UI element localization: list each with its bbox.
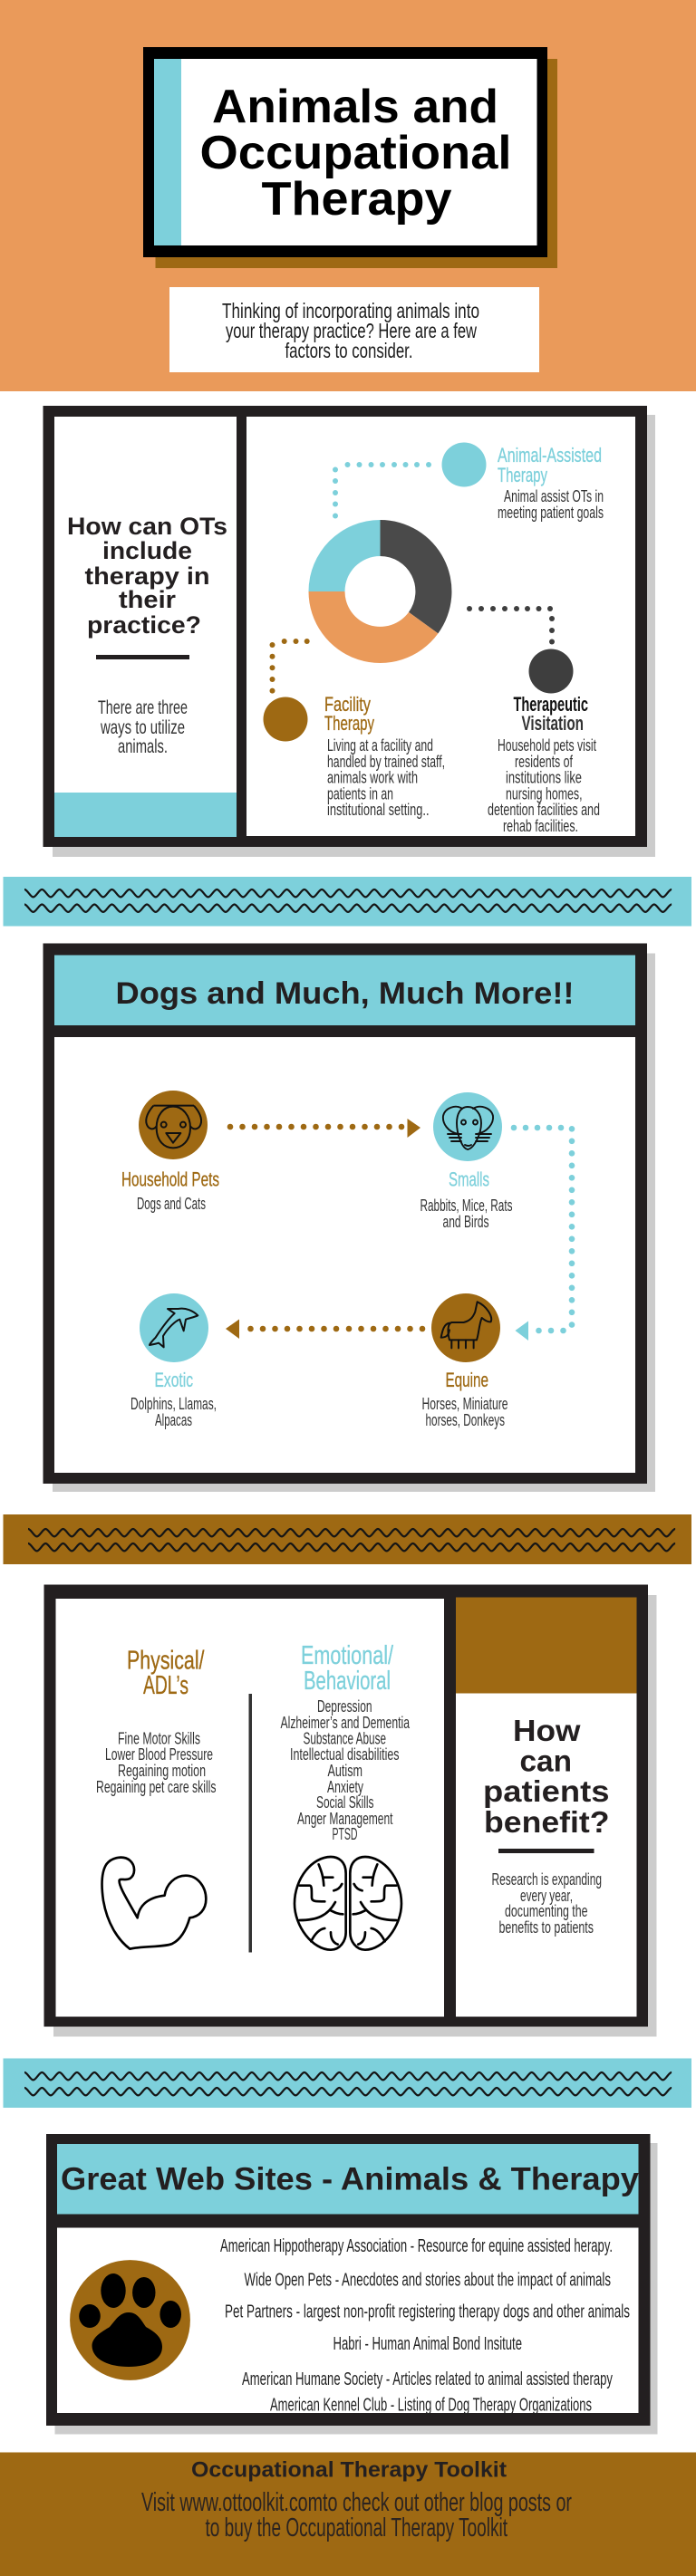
column: emotional: Emotional/ <box>301 1641 394 1670</box>
marker: animal-assisted <box>442 442 486 487</box>
label: household pets <box>121 1168 219 1213</box>
heading: how can OTs: practice? <box>87 611 201 639</box>
intro text box: your therapy practice? Here are a few <box>226 319 477 342</box>
label: exotic <box>130 1369 217 1429</box>
text: three ways <box>98 697 188 757</box>
text: therapeutic visitation: residents of <box>515 752 574 771</box>
header bar <box>57 2144 638 2214</box>
column: physical: Regaining motion <box>118 1761 206 1780</box>
column: emotional: Substance Abuse <box>303 1728 386 1748</box>
divider band: brown waves <box>4 1514 691 1564</box>
column: emotional: Social Skills <box>316 1793 373 1812</box>
divider band: teal waves <box>4 877 691 926</box>
panel: how can OTs include therapy <box>44 406 655 857</box>
text: research: Research is expanding <box>491 1870 602 1889</box>
column: emotional: Intellectual disabilities <box>290 1745 399 1764</box>
label: smalls: Rabbits, Mice, Rats <box>420 1196 513 1215</box>
column: physical: ADL’s <box>143 1671 188 1700</box>
column: physical: Fine Motor Skills <box>118 1728 200 1748</box>
heading: how can patients benefit: benefit? <box>484 1805 609 1839</box>
text: three ways: animals. <box>118 736 168 757</box>
label: smalls: Smalls <box>449 1168 489 1190</box>
text: facility therapy: patients in an <box>327 784 393 803</box>
label: exotic: Exotic <box>154 1369 193 1391</box>
panel: great web sites <box>46 2134 658 2435</box>
panel: orange header <box>0 0 696 391</box>
intro text box: factors to consider. <box>285 339 413 362</box>
label: equine: Equine <box>446 1369 488 1391</box>
icon: mouse <box>433 1092 502 1161</box>
label: household pets: Household Pets <box>121 1168 219 1190</box>
text: research <box>491 1870 602 1937</box>
title: Animals and <box>212 81 498 133</box>
column: emotional: PTSD <box>332 1824 357 1843</box>
text: facility therapy: handled by trained staff, <box>327 752 445 771</box>
title <box>199 81 511 226</box>
text: facility therapy: animals work with <box>327 768 418 786</box>
heading: how can OTs: include <box>102 537 192 564</box>
marker: facility therapy <box>263 697 308 741</box>
label: equine <box>422 1369 508 1429</box>
column: emotional: Anxiety <box>327 1777 363 1796</box>
heading rule <box>96 655 189 659</box>
text: facility therapy: Facility <box>324 693 372 716</box>
marker: therapeutic visitation <box>529 649 573 694</box>
text: animal-assisted therapy: Therapy <box>498 464 547 486</box>
label: smalls <box>420 1168 513 1231</box>
footer heading: Occupational Therapy Toolkit <box>191 2458 507 2482</box>
label: household pets: Dogs and Cats <box>137 1194 206 1213</box>
panel: how can patients benefit <box>44 1585 656 2036</box>
label: exotic: Dolphins, Llamas, <box>130 1394 217 1413</box>
text: therapeutic visitation: detention facilities and <box>488 800 600 819</box>
column: emotional: Autism <box>328 1761 362 1780</box>
arrow: equine to exotic <box>226 1319 425 1339</box>
heading: great web sites: Great Web Sites - Animals & Therapy <box>61 2161 640 2197</box>
text: animal-assisted therapy <box>498 444 604 522</box>
text: therapeutic visitation: rehab facilities. <box>503 816 578 835</box>
text: therapeutic visitation: Visitation <box>522 712 584 735</box>
icon: horse <box>431 1293 500 1362</box>
column: physical: Lower Blood Pressure <box>105 1745 213 1764</box>
column: physical: Regaining pet care skills <box>96 1777 216 1796</box>
connector: animal-assisted dots <box>333 462 431 518</box>
column: physical: Physical/ <box>127 1647 205 1676</box>
heading: how can OTs: therapy in <box>85 562 210 590</box>
text: animal-assisted therapy: Animal-Assisted <box>498 444 602 466</box>
text: research: benefits to patients <box>498 1918 594 1937</box>
text: facility therapy: institutional setting.. <box>327 800 430 819</box>
panel: footer <box>0 2453 696 2576</box>
text: therapeutic visitation: Therapeutic <box>513 693 588 716</box>
arrow: smalls to equine <box>511 1125 575 1341</box>
column: emotional: Depression <box>317 1697 372 1716</box>
column: emotional: Alzheimer’s and Dementia <box>281 1713 410 1732</box>
text: facility therapy: Therapy <box>324 712 374 735</box>
donut chart <box>308 520 451 663</box>
heading rule <box>498 1849 594 1853</box>
list: web sites <box>220 2236 630 2415</box>
heading: how can patients benefit <box>483 1714 609 1839</box>
list: web sites: Habri - Human Animal Bond Insitute <box>334 2334 522 2354</box>
text: facility therapy: Living at a facility and <box>327 735 433 755</box>
text: therapeutic visitation <box>488 693 600 835</box>
footer text: to buy the Occupational Therapy Toolkit <box>205 2514 508 2542</box>
brown block <box>456 1598 636 1694</box>
heading: how can OTs: their <box>119 586 177 613</box>
heading: how can patients benefit: patients <box>483 1774 609 1808</box>
icon: paw <box>70 2260 190 2380</box>
text: therapeutic visitation: Household pets visit <box>498 735 596 755</box>
column divider <box>248 1694 252 1953</box>
title: Therapy <box>261 173 452 226</box>
heading: how can OTs: How can OTs <box>67 513 227 540</box>
arrow: pets to smalls <box>227 1119 420 1138</box>
text: therapeutic visitation: nursing homes, <box>506 784 582 803</box>
text: three ways: There are three <box>98 697 188 718</box>
connector: therapeutic visitation dots <box>467 606 555 645</box>
icon: dolphin <box>140 1293 208 1362</box>
column: emotional: Behavioral <box>304 1667 391 1696</box>
text: animal-assisted therapy: meeting patient goals <box>498 503 604 522</box>
text: therapeutic visitation: institutions like <box>506 768 582 786</box>
column: emotional <box>281 1641 410 1843</box>
heading: dogs and much more: Dogs and Much, Much More!! <box>116 976 575 1011</box>
intro text box <box>169 287 539 372</box>
text: animal-assisted therapy: Animal assist OTs in <box>504 486 604 505</box>
heading: how can patients benefit: How <box>513 1714 581 1747</box>
column: emotional: Anger Management <box>297 1809 393 1828</box>
icon: brain <box>295 1857 401 1950</box>
footer text <box>141 2488 572 2542</box>
divider band: teal waves <box>4 2058 691 2108</box>
text: research: documenting the <box>505 1901 587 1920</box>
text: research: every year, <box>520 1886 573 1905</box>
heading: how can patients benefit: can <box>520 1745 572 1777</box>
intro text box: Thinking of incorporating animals into <box>222 299 479 322</box>
header bar <box>54 955 635 1025</box>
label: equine: Horses, Miniature <box>422 1394 508 1413</box>
label: smalls: and Birds <box>442 1212 489 1231</box>
title: Occupational <box>199 127 511 179</box>
connector: facility therapy dots <box>270 639 310 694</box>
icon: dog <box>139 1091 208 1159</box>
column: physical <box>96 1647 216 1796</box>
label: equine: horses, Donkeys <box>426 1410 505 1429</box>
panel: dogs and much more <box>44 944 655 1492</box>
icon: flexed arm <box>102 1858 206 1949</box>
title card <box>143 47 557 268</box>
text: facility therapy <box>324 693 445 819</box>
text: three ways: ways to utilize <box>100 717 185 738</box>
heading: how can OTs <box>67 513 227 639</box>
label: exotic: Alpacas <box>155 1410 192 1429</box>
